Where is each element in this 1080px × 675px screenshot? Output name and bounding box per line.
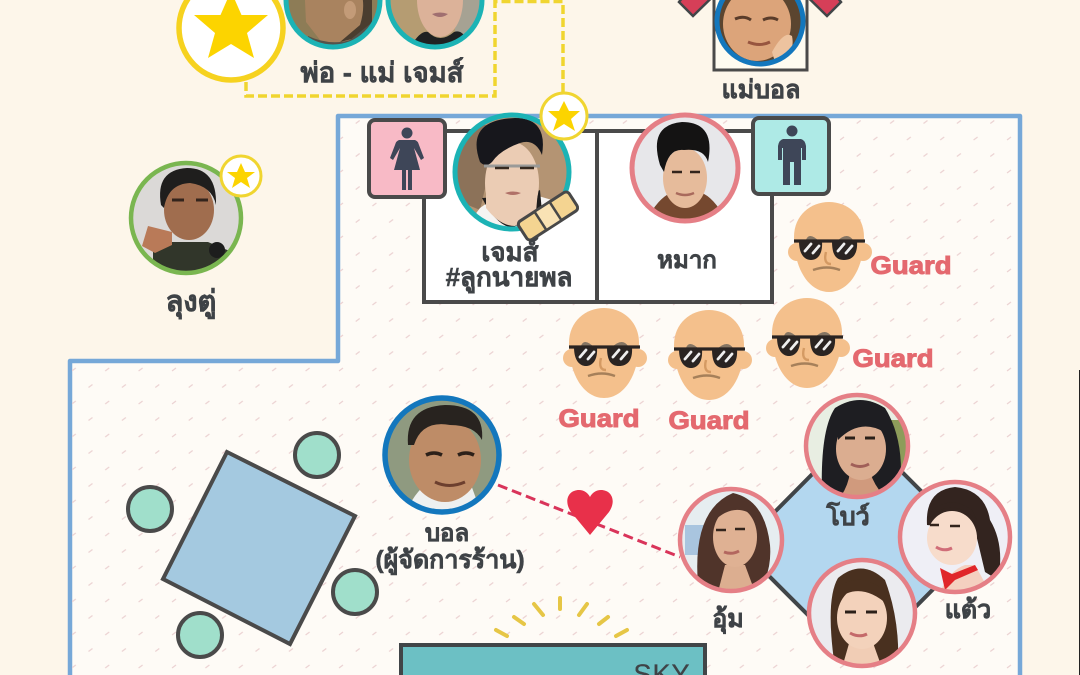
crossed red bars	[679, 0, 841, 16]
dashed connector: parents to James	[246, 2, 563, 96]
portrait: James	[453, 114, 571, 232]
right edge strip	[1079, 370, 1080, 675]
guard label: Guard	[852, 345, 934, 373]
icon: bandage	[517, 190, 579, 242]
star badge: uncle Tu	[221, 156, 261, 196]
label: Um: อุ้ม	[712, 605, 744, 635]
rooms	[424, 131, 772, 302]
guard	[668, 310, 752, 400]
portrait: uncle Tu	[130, 162, 242, 280]
star badge: parents	[179, 0, 283, 80]
portrait: Maak	[631, 114, 739, 225]
sky bar counter	[401, 645, 705, 675]
guard label: Guard	[558, 405, 640, 433]
yellow sparkle rays	[496, 598, 627, 636]
men's room sign	[753, 118, 829, 194]
guard	[788, 202, 872, 292]
icon: heart	[567, 490, 613, 535]
portrait: Ball	[384, 397, 500, 515]
label: Ball: บอล	[425, 520, 469, 547]
label: James: เจมส์	[481, 237, 539, 267]
label: mother of Ball: แม่บอล	[722, 76, 800, 104]
portrait: Um	[680, 489, 782, 592]
portrait: Bow	[805, 394, 910, 500]
label: uncle Tu: ลุงตู่	[166, 286, 216, 319]
label: James hashtag: #ลูกนายพล	[446, 262, 572, 294]
label: parents: พ่อ - แม่ เจมส์	[300, 57, 464, 88]
label: Bow: โบว์	[825, 501, 870, 531]
dashed love line	[498, 485, 680, 557]
label: Taew: แต้ว	[945, 596, 991, 624]
table with chairs	[128, 433, 377, 657]
frame: mother of Ball	[714, 0, 807, 70]
portrait: bottom woman	[808, 560, 916, 668]
guard	[563, 308, 647, 398]
portrait: Taew	[898, 482, 1012, 594]
floor plan outline	[70, 116, 1020, 675]
diamond table	[740, 428, 976, 665]
label: shop manager: (ผู้จัดการร้าน)	[375, 546, 525, 576]
guard	[766, 298, 850, 388]
label: Maak: หมาก	[657, 247, 717, 274]
guard label: Guard	[870, 252, 952, 280]
guard label: Guard	[668, 407, 750, 435]
portrait: mother of Ball	[716, 0, 804, 66]
star badge: James	[541, 93, 587, 139]
portrait: mother	[388, 0, 485, 48]
portrait: father	[285, 0, 381, 48]
women's room sign	[369, 120, 445, 197]
